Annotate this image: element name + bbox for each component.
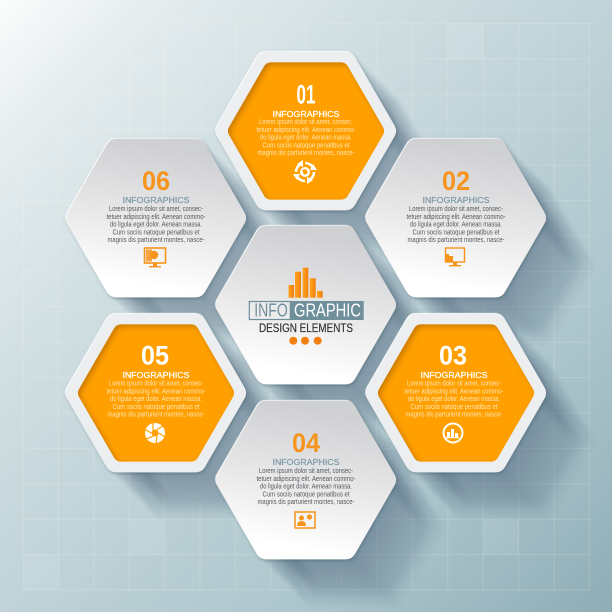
icon: monitor with pie bbox=[144, 248, 166, 267]
body text: do ligula eget dolor. Aenean massa. bbox=[408, 396, 500, 403]
body text: tetuer adipiscing elit. Aenean commo- bbox=[406, 214, 506, 221]
heading: INFOGRAPHICS bbox=[122, 370, 190, 380]
body text: Cum sociis natoque penatibus et bbox=[112, 229, 200, 236]
body text: tetuer adipiscing elit. Aenean commo- bbox=[256, 127, 356, 134]
heading: INFOGRAPHICS bbox=[122, 195, 190, 205]
panel: 06 bbox=[77, 150, 235, 286]
body text: magnis dis parturient montes, nasce- bbox=[258, 499, 355, 506]
body text: tetuer adipiscing elit. Aenean commo- bbox=[106, 214, 206, 221]
body text: Cum sociis natoque penatibus et bbox=[410, 404, 498, 411]
body text: magnis dis parturient montes, nasce- bbox=[108, 412, 205, 418]
heading: INFOGRAPHICS bbox=[272, 457, 340, 467]
body text: magnis dis parturient montes, nasce- bbox=[108, 237, 205, 244]
body text bbox=[106, 380, 206, 418]
icon: aperture bbox=[145, 422, 165, 444]
number 06: 06 bbox=[142, 166, 170, 196]
logo bars bbox=[288, 268, 323, 298]
long shadows bbox=[81, 67, 583, 596]
panel: 03 bbox=[377, 325, 535, 461]
body text bbox=[256, 468, 356, 506]
body text: tetuer adipiscing elit. Aenean commo- bbox=[256, 476, 356, 483]
logo banner: INFO bbox=[254, 300, 288, 320]
heading: INFOGRAPHICS bbox=[422, 195, 490, 205]
body text: tetuer adipiscing elit. Aenean commo- bbox=[106, 388, 206, 396]
body text: do ligula eget dolor. Aenean massa. bbox=[110, 222, 202, 229]
body text: Cum sociis natoque penatibus et bbox=[412, 229, 500, 236]
logo dots bbox=[289, 337, 322, 345]
body text: Lorem ipsum dolor sit amet, consec- bbox=[109, 206, 204, 213]
number 05: 05 bbox=[141, 340, 169, 370]
body text: do ligula eget dolor. Aenean massa. bbox=[110, 396, 202, 403]
body text: tetuer adipiscing elit. Aenean commo- bbox=[404, 388, 504, 396]
body text: Lorem ipsum dolor sit amet, consec- bbox=[407, 380, 502, 388]
body text: Cum sociis natoque penatibus et bbox=[262, 491, 350, 498]
body text: do ligula eget dolor. Aenean massa. bbox=[260, 484, 352, 491]
number 01: 01 bbox=[296, 80, 316, 110]
heading: INFOGRAPHICS bbox=[272, 109, 340, 119]
body text: magnis dis parturient montes, nasce- bbox=[406, 412, 503, 418]
logo banner bbox=[249, 300, 364, 320]
heading: INFOGRAPHICS bbox=[420, 370, 488, 380]
body text: Lorem ipsum dolor sit amet, consec- bbox=[109, 380, 204, 388]
icon: circular arrows bbox=[293, 160, 317, 184]
body text bbox=[404, 380, 504, 418]
panel: 01 bbox=[227, 63, 385, 199]
panel: center logo bbox=[227, 237, 385, 373]
logo banner: GRAPHIC bbox=[294, 300, 361, 320]
icon: circle with bars bbox=[444, 424, 462, 442]
body text: magnis dis parturient montes, nasce- bbox=[408, 237, 505, 244]
icon: monitor with chart bbox=[445, 248, 464, 266]
body text: Cum sociis natoque penatibus et bbox=[262, 142, 350, 149]
body text: do ligula eget dolor. Aenean massa. bbox=[410, 222, 502, 229]
panel: 04 bbox=[227, 412, 385, 548]
number 04: 04 bbox=[292, 428, 320, 458]
number 02: 02 bbox=[442, 166, 470, 196]
panel: 05 bbox=[77, 325, 235, 461]
body text: Lorem ipsum dolor sit amet, consec- bbox=[409, 206, 504, 213]
body text bbox=[406, 206, 506, 244]
number 03: 03 bbox=[439, 340, 467, 370]
body text: Lorem ipsum dolor sit amet, consec- bbox=[259, 119, 354, 126]
body text: Lorem ipsum dolor sit amet, consec- bbox=[259, 468, 354, 475]
icon: presenter bbox=[295, 512, 315, 528]
logo subtitle: DESIGN ELEMENTS bbox=[259, 323, 353, 335]
body text bbox=[256, 119, 356, 157]
panel: 02 bbox=[377, 150, 535, 286]
body text: do ligula eget dolor. Aenean massa. bbox=[260, 135, 352, 142]
body text: Cum sociis natoque penatibus et bbox=[112, 404, 200, 411]
body text: magnis dis parturient montes, nasce- bbox=[258, 150, 355, 157]
body text bbox=[106, 206, 206, 244]
